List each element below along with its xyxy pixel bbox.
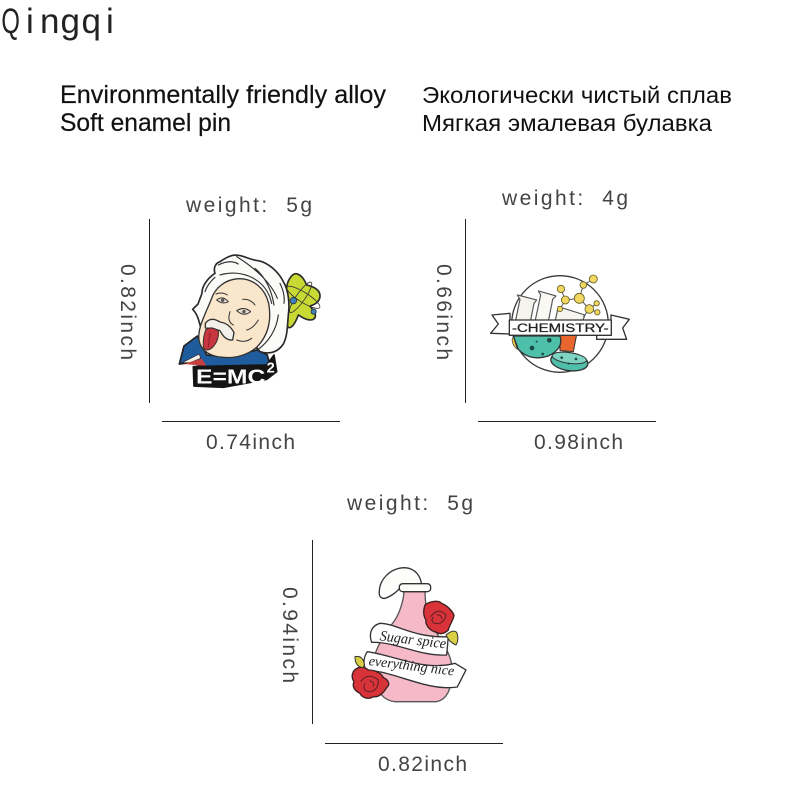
height label: 0.94inch: [278, 587, 301, 683]
icon: Sugar spice flask pin: [352, 568, 466, 702]
width label: 0.98inch: [534, 431, 623, 454]
height label: 0.66inch: [432, 264, 455, 360]
Russian description: Мягкая эмалевая булавка: [422, 110, 712, 136]
icon: Chemistry pin: -CHEMISTRY-: [512, 322, 609, 335]
width label: 0.82inch: [378, 753, 467, 776]
Russian description: [422, 82, 732, 136]
weight label: weight: 5g: [185, 194, 312, 217]
English description: Soft enamel pin: [60, 109, 231, 137]
icon: Einstein pin: E=MC: [196, 365, 265, 388]
width label: 0.74inch: [206, 431, 295, 454]
Russian description: Экологически чистый сплав: [422, 82, 732, 108]
brand title: ingqi: [26, 2, 114, 41]
English description: [60, 81, 386, 137]
panel: Einstein pin specification: [116, 194, 340, 454]
icon: Sugar spice flask pin: everything nice: [368, 654, 455, 679]
width dimension line: [325, 742, 503, 744]
brand title: Q: [1, 3, 20, 41]
icon: Sugar spice flask pin: Sugar spice: [379, 628, 447, 652]
height dimension line: [464, 219, 466, 403]
height label: 0.82inch: [116, 264, 139, 360]
English description: Environmentally friendly alloy: [60, 81, 386, 109]
weight label: weight: 4g: [501, 187, 628, 210]
width dimension line: [162, 420, 340, 422]
panel: Chemistry pin specification: [432, 187, 656, 454]
weight label: weight: 5g: [346, 492, 473, 515]
width dimension line: [478, 420, 656, 422]
panel: Sugar spice pin specification: [278, 492, 503, 776]
height dimension line: [312, 540, 314, 724]
icon: Einstein pin: 2: [267, 361, 275, 377]
height dimension line: [148, 219, 150, 403]
icon: Chemistry pin: [491, 275, 629, 373]
icon: Einstein pin: [179, 255, 322, 388]
